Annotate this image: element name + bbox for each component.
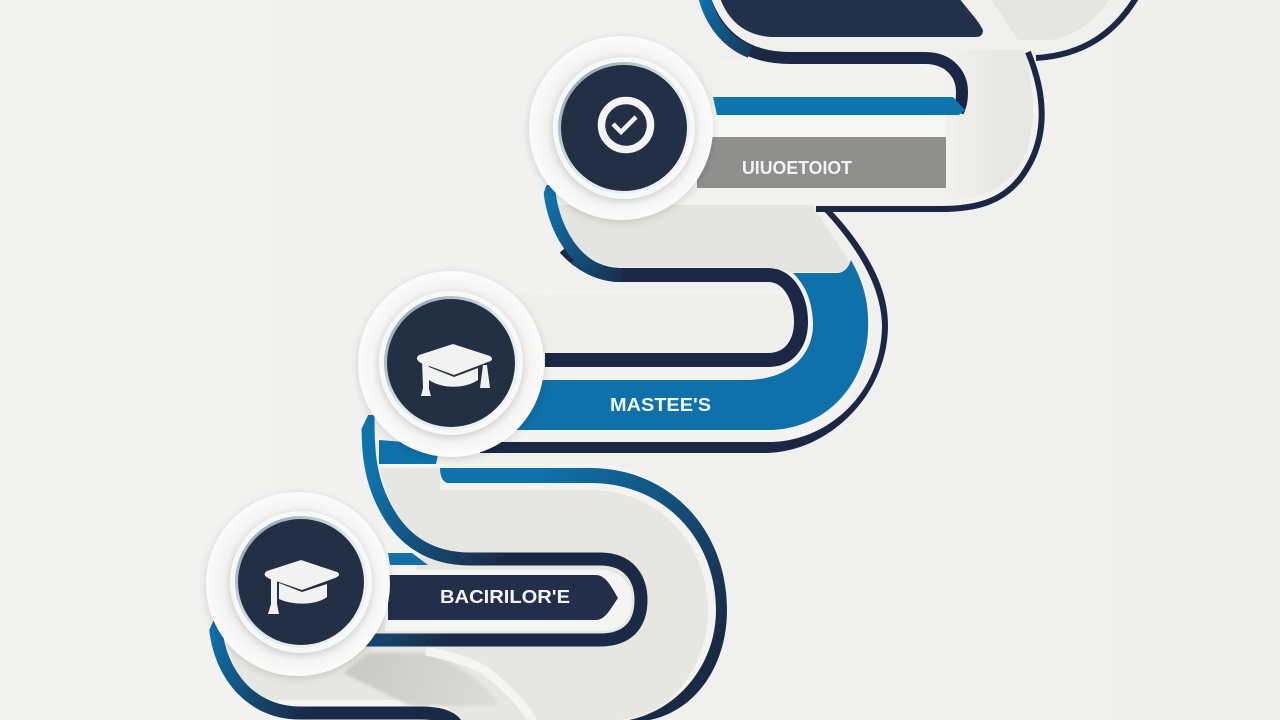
grey shadow [343,653,497,706]
upper-right panel [990,0,1110,40]
lower-left line [549,185,622,275]
tapered line tips [201,175,550,635]
icon: graduation cap [265,560,339,614]
outer right line [440,468,727,720]
S-shaped line into navy loop [365,415,641,640]
blue band [515,260,868,430]
white loop [385,570,632,631]
master's label: MASTEE'S [610,395,711,415]
blue wedge [388,553,428,565]
navy top shape [720,0,983,37]
ribbon base [610,60,1041,207]
undergraduate label: UIUOETOIOT [742,158,852,178]
icon: graduation cap [417,344,492,396]
ribbon body [210,464,727,720]
right ribbon body [945,50,1033,201]
lower left line [215,617,456,720]
grey label bar [697,137,946,188]
lower grey body [556,205,850,272]
navy loop [545,248,801,360]
bright strip [712,115,968,137]
ribbon base [420,258,872,442]
bottom stage: bachelor's ribbon [210,415,727,720]
outer right line [816,52,1042,209]
bachelor's bar [388,575,618,620]
node: master's cap badge [358,271,544,457]
outer navy line [480,209,888,453]
white diagonal stripe [426,651,533,720]
lower blue bits [379,440,440,464]
top stage: undergraduate ribbon [549,0,1136,275]
interior panel [500,294,797,353]
upper navy loop [704,0,962,112]
middle stage: master's ribbon [379,209,888,464]
icon: check mark [602,100,650,150]
upper-right line [1036,0,1136,58]
node: top check badge [529,36,713,220]
blue bar [713,97,965,115]
node: bachelor's cap badge [206,492,390,676]
bachelor's label: BACIRILOR'E [440,587,570,607]
